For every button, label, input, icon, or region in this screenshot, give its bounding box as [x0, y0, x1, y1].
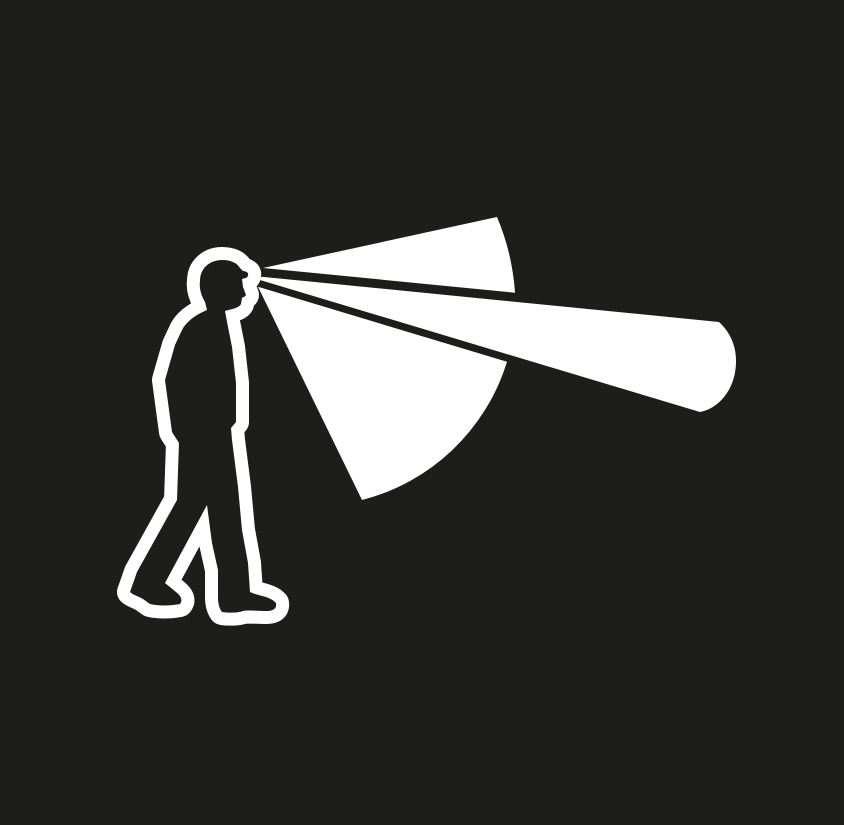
icon: walking person in cap with white outline [130, 260, 276, 613]
icon: light beams from the eyes [258, 217, 736, 500]
lower vision wedge [258, 287, 507, 500]
upper vision wedge [263, 217, 515, 293]
person silhouette with white offset outline [130, 260, 276, 613]
central long beam [260, 277, 736, 412]
